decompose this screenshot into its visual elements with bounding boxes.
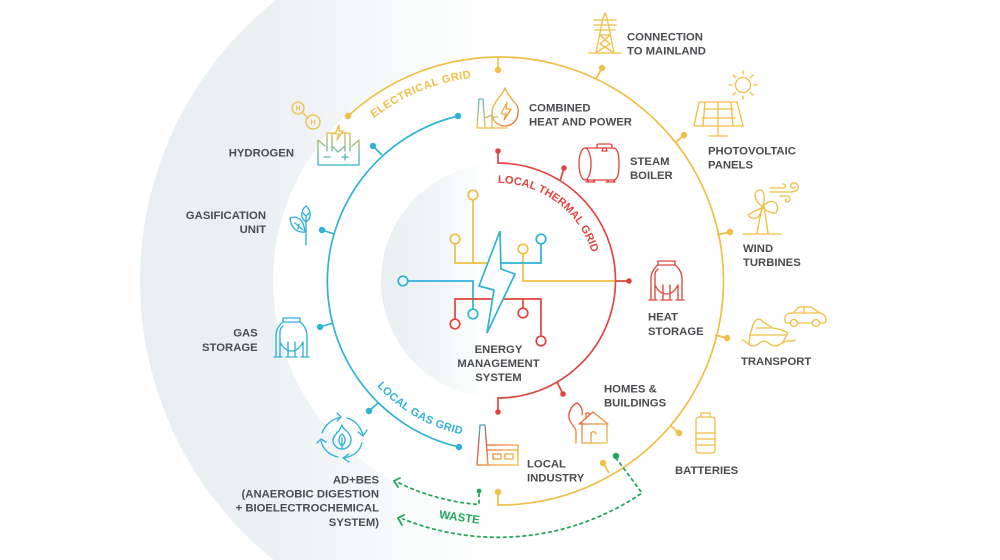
label: steam boiler bbox=[630, 156, 673, 182]
label: connection to mainland: TO MAINLAND bbox=[627, 46, 706, 58]
label: heat storage: STORAGE bbox=[648, 326, 704, 338]
label: AD+BES: + BIOELECTROCHEMICAL bbox=[236, 502, 379, 514]
icon: batteries bbox=[696, 413, 715, 453]
label: local industry bbox=[527, 459, 585, 485]
label: steam boiler: STEAM bbox=[630, 156, 670, 168]
label: energy management system: SYSTEM bbox=[475, 372, 522, 384]
icon: transport ship and car bbox=[742, 307, 826, 346]
label: photovoltaic panels: PHOTOVOLTAIC bbox=[708, 146, 796, 158]
label: local industry: INDUSTRY bbox=[527, 473, 585, 485]
icon: hydrogen electrolyser: H bbox=[310, 120, 316, 126]
electrical grid ring bbox=[345, 57, 733, 505]
icon: AD+BES recycling flame bbox=[317, 413, 367, 462]
label: photovoltaic panels: PANELS bbox=[708, 160, 753, 172]
label: wind turbines: TURBINES bbox=[743, 257, 801, 269]
label: heat storage bbox=[648, 312, 704, 338]
icon: gas storage bbox=[274, 318, 309, 357]
label: gasification unit: UNIT bbox=[240, 224, 266, 236]
label: energy management system: ENERGY bbox=[475, 344, 523, 356]
label: homes and buildings: BUILDINGS bbox=[604, 398, 667, 410]
label: steam boiler: BOILER bbox=[630, 170, 673, 182]
label: AD+BES: AD+BES bbox=[333, 474, 379, 486]
label: electrical grid: ELECTRICAL GRID bbox=[370, 70, 470, 118]
waste arrows bbox=[394, 453, 642, 537]
label: gasification unit: GASIFICATION bbox=[186, 210, 266, 222]
label: gasification unit bbox=[186, 210, 266, 236]
local gas grid ring bbox=[317, 113, 462, 450]
icon: photovoltaic panels bbox=[694, 71, 757, 136]
icon: combined heat and power bbox=[477, 88, 518, 128]
label: homes and buildings: HOMES & bbox=[604, 384, 657, 396]
label: connection to mainland: CONNECTION bbox=[627, 32, 703, 44]
background: white disc bbox=[273, 56, 723, 506]
label: local gas grid: LOCAL GAS GRID bbox=[378, 381, 462, 434]
energy management system diagram bbox=[398, 190, 615, 346]
label: energy management system bbox=[457, 344, 540, 384]
icon: wind turbines bbox=[743, 183, 798, 234]
icon: heat storage bbox=[649, 261, 684, 300]
background: inner grey disc bbox=[381, 164, 615, 398]
icon: hydrogen electrolyser bbox=[292, 102, 359, 165]
label: gas storage: GAS bbox=[233, 328, 258, 340]
label: combined heat and power bbox=[529, 102, 632, 128]
icon: gasification unit leaves bbox=[290, 206, 310, 245]
label: AD+BES: SYSTEM) bbox=[329, 517, 379, 529]
icon: local industry bbox=[477, 425, 518, 465]
label: hydrogen: HYDROGEN bbox=[229, 148, 294, 160]
label: waste: WASTE bbox=[438, 509, 481, 527]
icon: hydrogen electrolyser: H bbox=[295, 106, 301, 112]
label: combined heat and power: COMBINED bbox=[529, 102, 591, 114]
icon: lightning bolt bbox=[479, 231, 515, 333]
label: energy management system: MANAGEMENT bbox=[457, 358, 540, 370]
label: AD+BES bbox=[236, 474, 379, 529]
local thermal grid ring bbox=[495, 148, 632, 415]
label: connection to mainland bbox=[627, 32, 706, 58]
label: local thermal grid: LOCAL THERMAL GRID bbox=[498, 175, 598, 252]
icon: homes and buildings bbox=[569, 403, 608, 443]
label: heat storage: HEAT bbox=[648, 312, 678, 324]
icon: connection to mainland pylon bbox=[589, 13, 621, 53]
label: homes and buildings bbox=[604, 384, 667, 410]
label: transport: TRANSPORT bbox=[741, 356, 811, 368]
label: wind turbines bbox=[743, 243, 801, 269]
label: photovoltaic panels bbox=[708, 146, 796, 172]
label: combined heat and power: HEAT AND POWER bbox=[529, 116, 632, 128]
label: gas storage bbox=[202, 328, 258, 354]
label: batteries: BATTERIES bbox=[675, 465, 739, 477]
label: local industry: LOCAL bbox=[527, 459, 566, 471]
label: wind turbines: WIND bbox=[743, 243, 773, 255]
label: AD+BES: (ANAEROBIC DIGESTION bbox=[242, 488, 379, 500]
label: gas storage: STORAGE bbox=[202, 342, 258, 354]
icon: steam boiler bbox=[579, 144, 619, 182]
